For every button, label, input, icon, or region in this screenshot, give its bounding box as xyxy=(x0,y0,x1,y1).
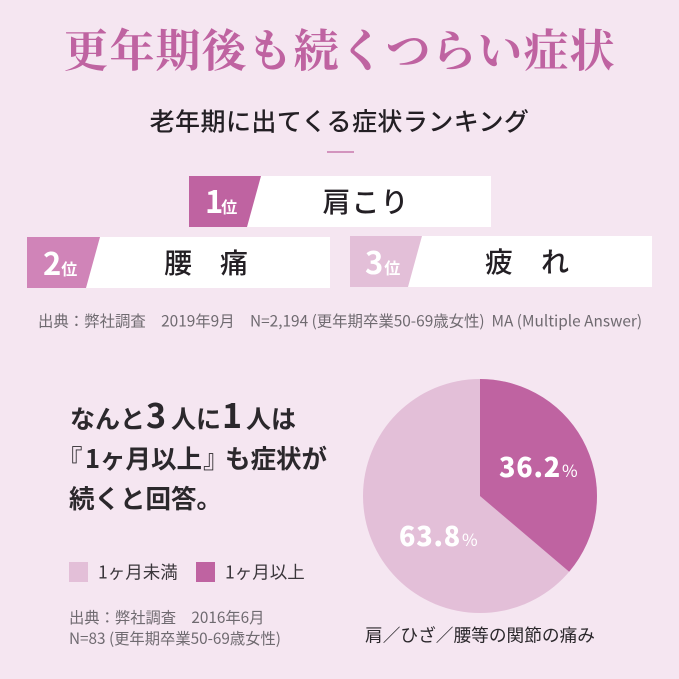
pie chart xyxy=(363,379,597,613)
rank 2 symptom: 腰 痛 xyxy=(164,242,248,282)
callout text: なんと xyxy=(70,400,145,436)
callout text: も症状が xyxy=(225,439,327,476)
callout text: 3 xyxy=(146,389,166,438)
rank 1 symptom: 肩こり xyxy=(322,181,410,221)
rank 3 symptom: 疲 れ xyxy=(485,241,569,281)
pie chart caption: 肩／ひざ／腰等の関節の痛み xyxy=(365,622,595,648)
callout text: 1 xyxy=(222,389,242,438)
source note: pie chart xyxy=(69,606,281,649)
value: 36.2%: 36.2% xyxy=(499,446,578,485)
badge: rank 1 xyxy=(189,176,261,227)
rank 2 label: 2位 xyxy=(43,239,77,284)
legend: 1ヶ月以上 xyxy=(225,560,305,584)
legend xyxy=(69,560,305,584)
callout text xyxy=(57,389,327,516)
legend: 1ヶ月未満 xyxy=(98,560,178,584)
panel: rank 3 xyxy=(350,236,652,287)
title: 更年期後も続くつらい症状 xyxy=(63,26,616,76)
source note: pie chart: 出典：弊社調査 2016年6月 xyxy=(69,606,264,628)
value: 63.8%: 63.8% xyxy=(399,515,478,554)
callout text: 人に xyxy=(171,400,221,436)
badge: rank 2 xyxy=(27,237,100,288)
callout text: 『 xyxy=(57,439,83,476)
callout text: 』 xyxy=(203,439,229,476)
badge: rank 3 xyxy=(350,236,422,287)
subtitle: 老年期に出てくる症状ランキング xyxy=(150,102,529,138)
callout text: 人は xyxy=(246,400,296,436)
rank 1 label: 1位 xyxy=(205,177,237,222)
source note: ranking: 出典：弊社調査 2019年9月 N=2,194 (更年期卒業50-69歳女性) MA (Multiple Answer) xyxy=(38,310,642,332)
panel: rank 2 xyxy=(27,237,330,288)
callout text: 続くと回答。 xyxy=(69,479,222,516)
callout text: 1ヶ月以上 xyxy=(85,439,202,476)
panel: rank 1 xyxy=(189,176,491,227)
rank 3 label: 3位 xyxy=(365,238,400,283)
source note: pie chart: N=83 (更年期卒業50-69歳女性) xyxy=(69,627,281,649)
